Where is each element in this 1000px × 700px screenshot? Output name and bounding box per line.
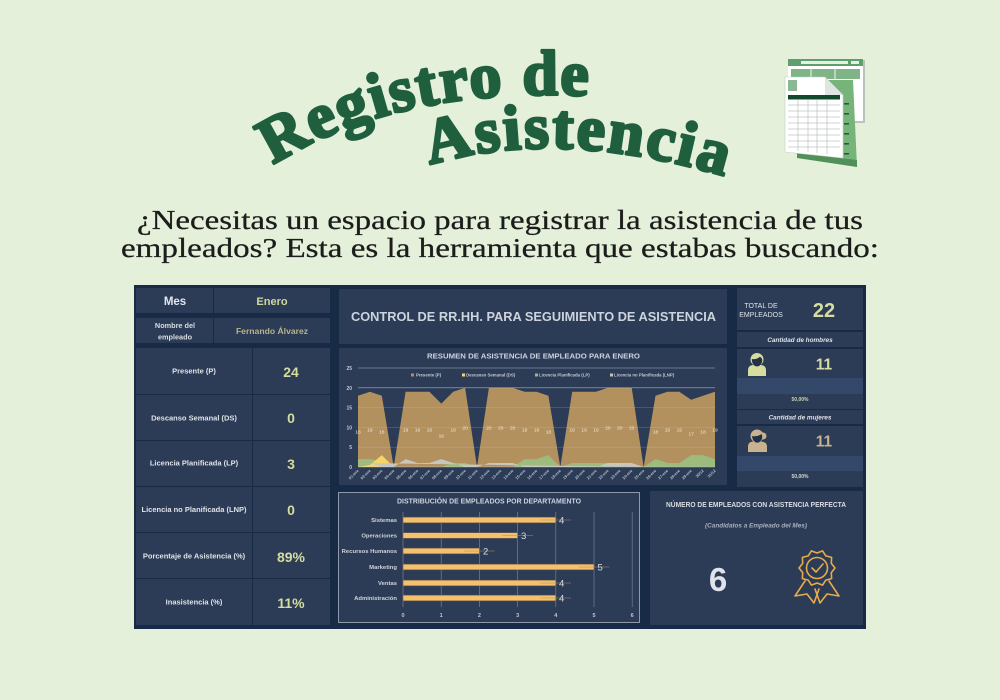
- area: licencia planificada: [358, 455, 715, 467]
- title: [252, 48, 728, 177]
- data labels: 19: [534, 428, 539, 434]
- date labels: 31/12: [706, 468, 717, 479]
- error bars: [464, 520, 609, 598]
- date labels: 24-ene: [621, 468, 634, 480]
- data labels: 18: [355, 430, 361, 436]
- y axis: 15: [346, 406, 352, 412]
- bars: [403, 517, 594, 601]
- panel: month and employee: Mes: [164, 296, 186, 308]
- value labels: 2: [483, 546, 488, 558]
- data labels: 18: [700, 430, 706, 436]
- x axis: 5: [592, 613, 596, 619]
- data labels: 19: [427, 428, 432, 434]
- grid lines: [403, 512, 632, 607]
- panel: attendance stats: 89%: [277, 549, 306, 565]
- y axis: 5: [349, 445, 352, 451]
- panel: men: [737, 332, 863, 409]
- date labels: 09-ene: [443, 468, 455, 480]
- legend: Licencia Planificada (LP): [539, 373, 590, 378]
- legend: [411, 373, 675, 378]
- data labels: 19: [581, 428, 587, 434]
- date labels: 26-ene: [645, 468, 658, 480]
- panel: perfect attendance: NÚMERO DE EMPLEADOS CON ASISTENCIA PERFECTA: [666, 500, 846, 509]
- area: licencia no planificada: [358, 459, 644, 467]
- data labels: [355, 426, 718, 440]
- date labels: 18-ene: [550, 468, 563, 480]
- panel: attendance area chart: RESUMEN DE ASISTENCIA DE EMPLEADO PARA ENERO: [427, 352, 640, 360]
- panel: month and employee: [136, 288, 330, 343]
- panel: department bar chart: DISTRIBUCIÓN DE EMPLEADOS POR DEPARTAMENTO: [397, 496, 581, 506]
- date labels: 01-ene: [347, 468, 360, 480]
- panel: women: 50,00%: [792, 474, 809, 480]
- data labels: 20: [486, 426, 492, 432]
- panel: attendance stats: 24: [283, 364, 299, 380]
- y axis: 0: [349, 465, 352, 471]
- panel: women: 11: [816, 434, 833, 450]
- date labels: 29-ene: [681, 468, 693, 480]
- value labels: 3: [521, 531, 526, 542]
- data labels: 20: [498, 426, 504, 432]
- panel: perfect attendance: (Candidatos a Empleado del Mes): [705, 522, 807, 530]
- title: Asistencia: [428, 104, 728, 177]
- panel: attendance stats: Licencia no Planificada (LNP): [141, 505, 247, 514]
- date labels: 27-ene: [657, 468, 670, 480]
- panel: month and employee: Enero: [256, 296, 288, 308]
- date labels: 05-ene: [395, 468, 408, 480]
- data labels: 19: [677, 428, 682, 434]
- panel: men: 11: [816, 356, 833, 374]
- panel: attendance stats: Presente (P): [172, 366, 216, 376]
- date labels: 17-ene: [538, 468, 551, 480]
- date labels: 14-ene: [502, 468, 515, 480]
- data labels: 19: [522, 428, 528, 434]
- dashboard: [134, 285, 866, 629]
- panel: perfect attendance: [650, 491, 863, 625]
- panel: men: Cantidad de hombres: [767, 337, 833, 344]
- category labels: Recursos Humanos: [342, 549, 398, 555]
- date labels: 22-ene: [597, 468, 610, 480]
- date labels: 28-ene: [669, 468, 682, 480]
- data labels: 20: [629, 426, 635, 432]
- x axis: 6: [631, 613, 634, 619]
- data labels: 20: [462, 426, 468, 432]
- area: descanso semanal: [358, 455, 394, 467]
- panel: women: Cantidad de mujeres: [769, 414, 832, 422]
- data labels: 18: [653, 430, 658, 436]
- date labels: 04-ene: [383, 468, 396, 480]
- y axis: 25: [346, 366, 352, 372]
- panel: department bar chart: [338, 492, 640, 622]
- x axis: [401, 613, 634, 619]
- panel: month and employee: Fernando Álvarez: [236, 326, 308, 336]
- panel: attendance stats: Descanso Semanal (DS): [151, 414, 237, 422]
- area: presente: [358, 388, 715, 467]
- legend: Descanso Semanal (DS): [466, 373, 516, 378]
- data labels: 18: [379, 430, 385, 436]
- category labels: Operaciones: [361, 534, 398, 540]
- panel: dashboard heading: [339, 289, 727, 344]
- x axis: 2: [478, 613, 481, 619]
- panel: attendance stats: Inasistencia (%): [166, 598, 223, 606]
- data labels: 17: [689, 432, 694, 438]
- date labels: 30/12: [694, 468, 705, 479]
- icon: spreadsheet: [785, 59, 865, 167]
- date labels: 13-ene: [490, 468, 503, 480]
- value labels: 4: [559, 516, 564, 526]
- panel: attendance stats: [136, 348, 330, 625]
- title: Registro de: [252, 48, 588, 166]
- date labels: 12-ene: [478, 468, 491, 480]
- x axis: 0: [401, 613, 405, 619]
- date labels: 23-ene: [609, 468, 622, 480]
- category labels: Marketing: [369, 565, 397, 571]
- data labels: 20: [617, 426, 623, 432]
- data labels: 19: [593, 428, 599, 434]
- panel: attendance stats: 0: [287, 410, 295, 426]
- panel: attendance stats: Porcentaje de Asistencia (%): [143, 552, 246, 560]
- legend: Licencia no Planificada (LNP): [614, 373, 675, 378]
- value labels: 5: [598, 562, 603, 574]
- grid lines: [358, 368, 715, 467]
- subtitle text: ¿Necesitas un espacio para registrar la asistencia de tus: [137, 205, 863, 235]
- icon: medal: [795, 551, 839, 603]
- date labels: 19-ene: [562, 468, 574, 480]
- date labels: 02-ene: [359, 468, 372, 480]
- category labels: Ventas: [378, 581, 398, 587]
- category labels: Sistemas: [371, 518, 398, 524]
- data labels: 19: [570, 428, 575, 434]
- value labels: 4: [559, 594, 564, 604]
- value labels: [483, 516, 603, 604]
- icon: man: [748, 353, 766, 376]
- y axis: 10: [346, 425, 352, 431]
- panel: attendance stats: 0: [287, 502, 295, 518]
- category labels: [342, 518, 398, 602]
- panel: month and employee: empleado: [158, 332, 193, 342]
- panel: total employees: TOTAL DE: [744, 303, 778, 310]
- date labels: [347, 468, 717, 480]
- data labels: 19: [712, 428, 718, 434]
- category labels: Administración: [354, 596, 397, 602]
- y axis: 20: [346, 386, 352, 392]
- value labels: 4: [559, 578, 564, 590]
- date labels: 11-ene: [467, 468, 479, 480]
- x axis: 3: [516, 613, 519, 619]
- legend: Presente (P): [416, 373, 442, 378]
- data labels: 19: [415, 428, 420, 434]
- data labels: 16: [439, 434, 444, 440]
- panel: total employees: EMPLEADOS: [739, 312, 783, 319]
- icon: woman: [748, 430, 767, 452]
- date labels: 16-ene: [526, 468, 539, 480]
- data labels: 19: [367, 428, 373, 434]
- panel: total employees: 22: [813, 300, 835, 322]
- date labels: 10-ene: [455, 468, 467, 480]
- panel: women: [737, 410, 863, 487]
- data labels: 20: [605, 426, 611, 432]
- subtitle text: empleados? Esta es la herramienta que estabas buscando:: [121, 233, 879, 263]
- data labels: 18: [546, 430, 551, 436]
- subtitle text: [121, 205, 879, 263]
- date labels: 20-ene: [574, 468, 586, 480]
- panel: dashboard heading: CONTROL DE RR.HH. PARA SEGUIMIENTO DE ASISTENCIA: [351, 309, 717, 324]
- panel: total employees: [737, 288, 863, 330]
- date labels: 15-ene: [514, 468, 527, 480]
- y axis: [346, 366, 352, 471]
- x axis: 4: [554, 613, 558, 619]
- panel: attendance stats: Licencia Planificada (LP): [150, 458, 239, 468]
- date labels: 08-ene: [431, 468, 444, 480]
- panel: attendance area chart: [339, 348, 727, 485]
- panel: perfect attendance: 6: [709, 561, 727, 598]
- data labels: 20: [510, 426, 516, 432]
- date labels: 21-ene: [585, 468, 598, 480]
- data labels: 19: [403, 428, 409, 434]
- date labels: 06-ene: [407, 468, 420, 480]
- panel: attendance stats: 3: [287, 456, 295, 472]
- data labels: 19: [451, 428, 456, 434]
- date labels: 25-ene: [633, 468, 646, 480]
- panel: attendance stats: 11%: [277, 595, 305, 611]
- panel: men: 50,00%: [792, 397, 809, 403]
- date labels: 03-ene: [371, 468, 384, 480]
- data labels: 19: [665, 428, 670, 434]
- x axis: 1: [440, 613, 443, 619]
- date labels: 07-ene: [419, 468, 432, 480]
- panel: month and employee: Nombre del: [155, 321, 195, 330]
